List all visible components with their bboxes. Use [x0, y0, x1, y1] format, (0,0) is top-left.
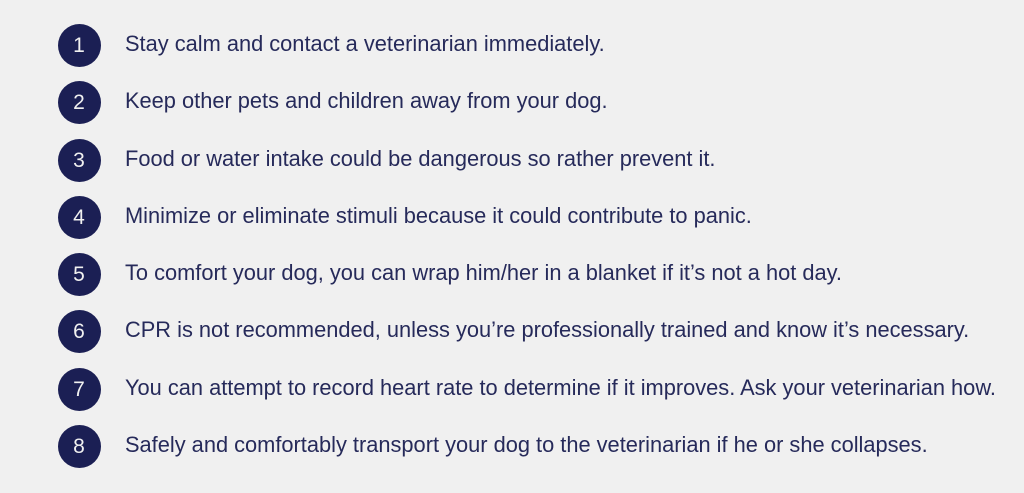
step 6 — [58, 310, 969, 353]
step 6: CPR is not recommended, unless you’re professionally trained and know it’s necessary. — [125, 316, 969, 342]
step 5 — [58, 253, 842, 296]
step 6: 6 — [73, 320, 85, 342]
step 8 — [58, 425, 928, 468]
step 3 — [58, 139, 716, 182]
step 1: 1 — [73, 34, 85, 56]
step 2: 2 — [73, 90, 85, 114]
step 2 — [58, 81, 608, 124]
step 8: 8 — [73, 435, 85, 458]
step 3: Food or water intake could be dangerous so rather prevent it. — [125, 146, 716, 170]
step 4: Minimize or eliminate stimuli because it could contribute to panic. — [125, 202, 752, 228]
step 3: 3 — [73, 148, 85, 172]
step 8: Safely and comfortably transport your dog to the veterinarian if he or she collapses. — [125, 432, 928, 457]
step 4: 4 — [73, 206, 85, 228]
step 7 — [58, 368, 996, 411]
step 7: You can attempt to record heart rate to determine if it improves. Ask your veterinarian how. — [125, 375, 996, 400]
step 1 — [58, 24, 605, 67]
step 5: 5 — [73, 262, 85, 286]
step 2: Keep other pets and children away from your dog. — [125, 88, 608, 112]
step 7: 7 — [73, 378, 85, 401]
step 5: To comfort your dog, you can wrap him/her in a blanket if it’s not a hot day. — [125, 260, 842, 284]
step 1: Stay calm and contact a veterinarian immediately. — [125, 30, 605, 56]
step 4 — [58, 196, 752, 239]
